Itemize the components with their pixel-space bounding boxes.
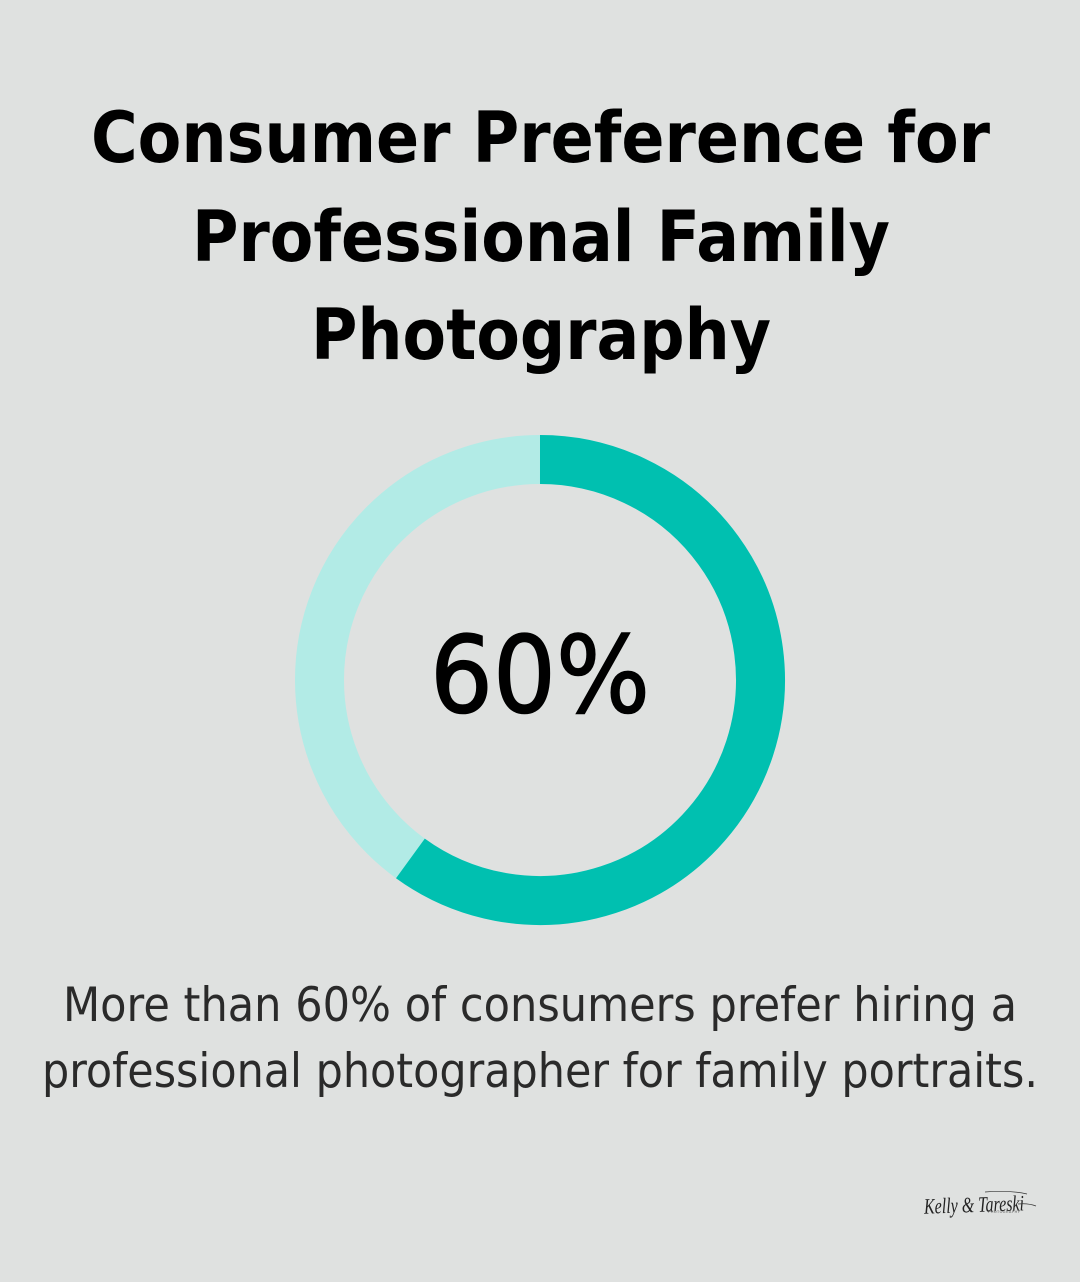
caption: More than 60% of consumers prefer hiring a (63, 978, 1017, 1033)
title: Professional Family (192, 196, 890, 278)
signature logo: PHOTOGRAPHY (988, 1210, 1021, 1214)
donut track (320, 460, 760, 900)
caption (42, 978, 1038, 1099)
title (91, 97, 990, 376)
signature logo: Kelly & Tareski (923, 1190, 1024, 1219)
title: Consumer Preference for (91, 97, 990, 179)
donut value arc (410, 460, 760, 900)
title: Photography (311, 294, 771, 376)
donut chart: 60% (320, 460, 760, 900)
donut value label: 60% (430, 614, 650, 737)
